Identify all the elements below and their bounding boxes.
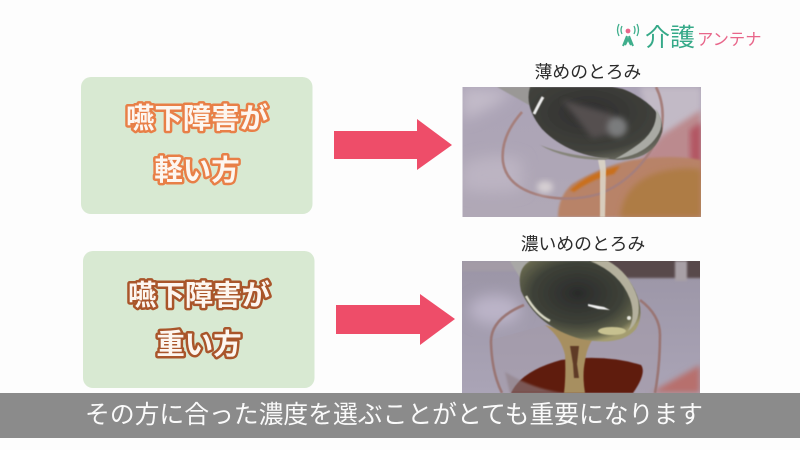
label: 薄めのとろみ: 薄めのとろみ	[535, 62, 641, 82]
arrow: bottom	[336, 294, 455, 345]
heading: 嚥下障害が: 嚥下障害が	[126, 102, 268, 135]
panel: severe dysphagia	[83, 251, 314, 388]
logo wordmark kanji: 介護	[645, 24, 695, 52]
photo: thin thickness	[462, 87, 702, 217]
glass	[491, 299, 661, 393]
caption text: その方に合った濃度を選ぶことがとても重要になります	[85, 401, 703, 429]
icon: antenna	[618, 24, 638, 46]
heading: 軽い方: 軽い方	[154, 155, 240, 187]
logo: 介護アンテナ	[618, 24, 761, 52]
heading: 嚥下障害が: 嚥下障害が	[128, 279, 270, 312]
label: 濃いめのとろみ: 濃いめのとろみ	[521, 234, 645, 254]
panel: mild dysphagia	[81, 77, 312, 214]
photo: thick thickness	[462, 255, 705, 393]
logo wordmark katakana: アンテナ	[697, 31, 761, 49]
arrow: top	[334, 119, 452, 170]
heading: 重い方: 重い方	[156, 329, 242, 361]
caption bar	[0, 393, 800, 438]
